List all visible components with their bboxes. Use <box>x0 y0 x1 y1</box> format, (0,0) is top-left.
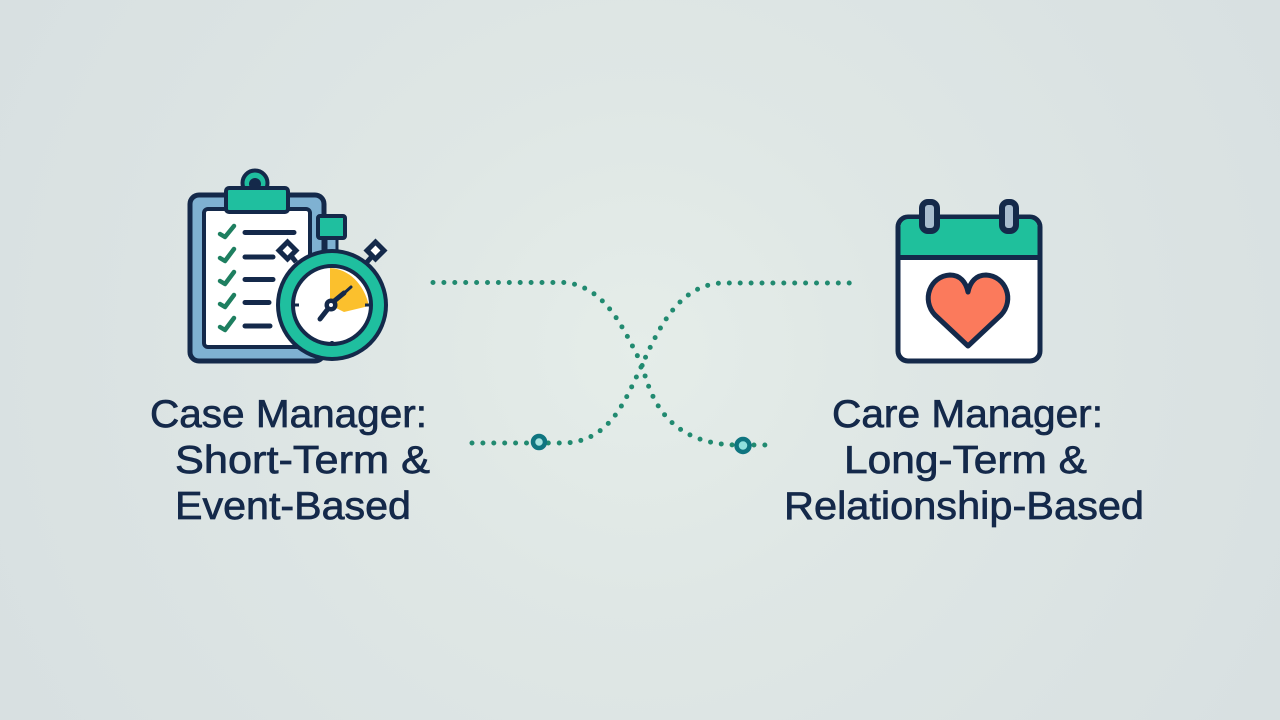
label: care manager: Care Manager: <box>832 393 1103 436</box>
stopwatch ticks <box>293 305 370 345</box>
connector: lower left path to care manager <box>472 283 860 443</box>
label: care manager: Long-Term & <box>844 439 1087 482</box>
icon: calendar with heart <box>898 202 1040 361</box>
clipboard clip <box>226 170 288 212</box>
label: case manager <box>150 393 430 528</box>
label: case manager: Short-Term & <box>175 439 430 482</box>
stopwatch body <box>276 249 388 361</box>
label: case manager: Case Manager: <box>150 393 427 436</box>
connector node right <box>736 439 750 452</box>
calendar rings <box>922 202 1016 231</box>
clipboard board <box>190 195 324 361</box>
connector: case manager path to lower right <box>433 282 766 445</box>
connector node left <box>533 436 545 448</box>
clipboard paper <box>204 209 310 347</box>
checklist check marks <box>220 226 234 330</box>
stopwatch crown <box>318 216 345 254</box>
label: care manager <box>784 393 1144 528</box>
calendar header <box>900 219 1038 257</box>
label: case manager: Event-Based <box>175 485 411 528</box>
stopwatch hands <box>320 287 351 319</box>
stopwatch side buttons <box>275 238 388 263</box>
icon: clipboard with checklist and stopwatch <box>190 170 388 361</box>
stopwatch yellow time wedge <box>330 268 369 312</box>
heart <box>928 275 1008 346</box>
checklist lines <box>245 232 294 326</box>
calendar page <box>898 217 1040 361</box>
label: care manager: Relationship-Based <box>784 485 1144 528</box>
